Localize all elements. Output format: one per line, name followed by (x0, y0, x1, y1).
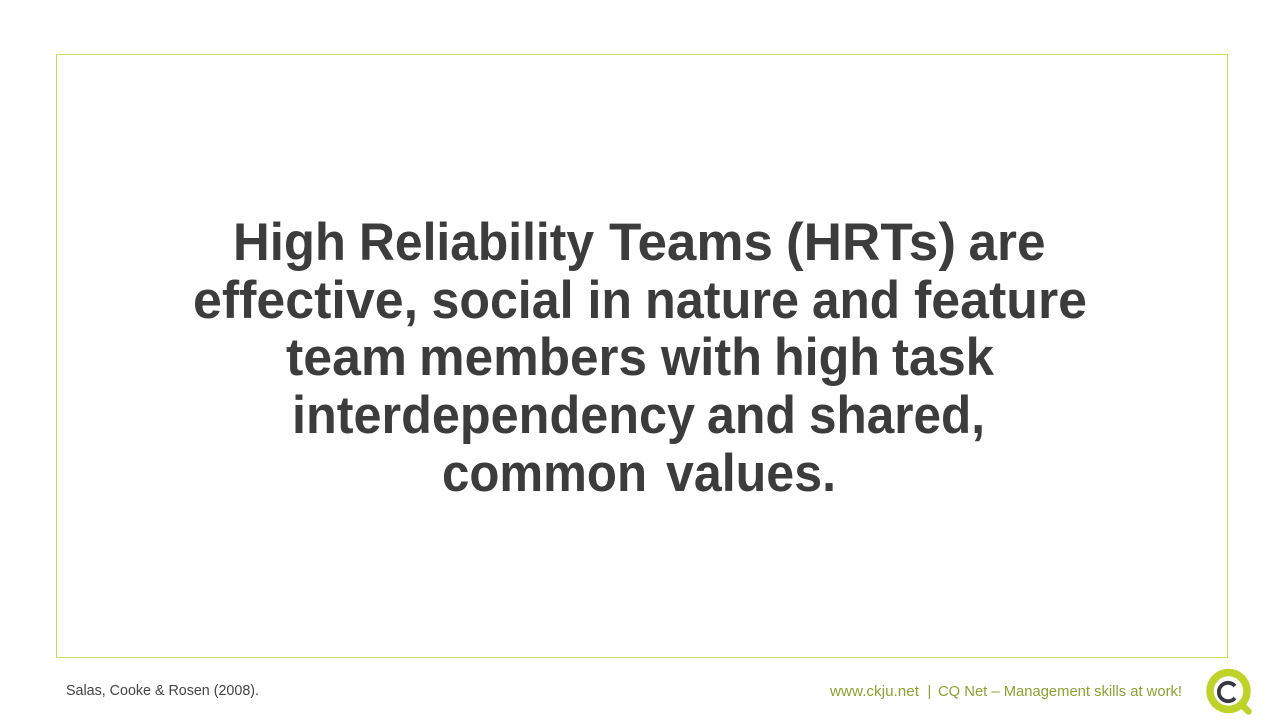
footer tagline: | (928, 684, 931, 700)
heading: main statement: team (286, 328, 407, 387)
footer tagline (829, 684, 1182, 700)
heading: main statement: interdependency (292, 386, 695, 445)
heading: main statement: members (419, 328, 647, 387)
heading: main statement: values. (666, 444, 836, 503)
heading: main statement: high (774, 328, 880, 387)
heading: main statement: effective, (193, 271, 418, 330)
heading: main statement: with (660, 328, 762, 387)
heading: main statement: Teams (609, 213, 773, 272)
heading: main statement: common (442, 444, 647, 503)
citation: Salas, Cooke & Rosen (2008). (66, 683, 259, 699)
heading: main statement: High (233, 213, 346, 272)
heading: main statement: Reliability (359, 213, 594, 272)
heading: main statement: feature (914, 271, 1087, 330)
heading: main statement: and (707, 386, 796, 445)
heading: main statement: are (968, 213, 1046, 272)
panel: green outlined frame (56, 54, 1228, 658)
heading: main statement: in (588, 271, 632, 330)
heading: main statement: nature (645, 271, 799, 330)
heading: main statement: social (432, 271, 574, 330)
heading: main statement: and (812, 271, 900, 330)
heading: main statement: (HRTs) (786, 213, 956, 272)
heading: main statement: shared, (809, 386, 985, 445)
footer tagline: www.ckju.net (829, 684, 919, 700)
heading: main statement (193, 213, 1087, 503)
footer tagline: CQ Net – Management skills at work! (938, 684, 1182, 700)
icon: CQ logo (1210, 672, 1248, 712)
heading: main statement: task (892, 328, 995, 387)
